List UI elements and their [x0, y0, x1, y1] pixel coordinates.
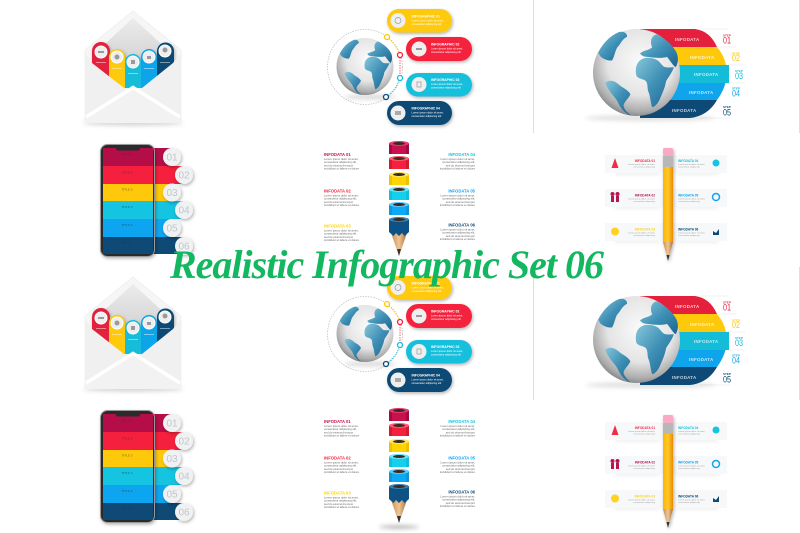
phone titles: TITLE 6 [122, 240, 133, 244]
pill 4: consectetur adipiscing elit [412, 114, 441, 118]
right text: INFODATA 05 [448, 188, 476, 194]
panel: phone bottom: 03 [166, 454, 178, 465]
left text: incididunt ut labore et dolore [324, 238, 360, 242]
right text: incididunt ut labore et dolore [440, 167, 475, 171]
pill 1 [387, 9, 452, 32]
card text left: INFODATA 01 [635, 159, 655, 163]
card text right: INFODATA 06 [678, 228, 699, 232]
pill 3: INFOGRAPHIC 03 [431, 78, 460, 82]
right text: sed do eiusmod tempor [446, 163, 475, 167]
panel: pencil with cards bottom: consectetur adipiscing [678, 432, 700, 436]
number circles: 01 [166, 152, 178, 164]
card text left: INFODATA 02 [635, 194, 655, 198]
panel: globe with pills bottom: INFOGRAPHIC 02 [431, 310, 460, 314]
step labels: STEP [732, 86, 740, 90]
panel: segmented pencil bottom: sed do eiusmod tempor [324, 502, 353, 506]
panel: phone bottom: TITLE 1 [122, 418, 133, 422]
right text: Lorem ipsum dolor sit amet, [440, 157, 475, 161]
panel: segmented pencil bottom: incididunt ut labore et dolore [324, 505, 360, 509]
pill 2 [406, 37, 472, 61]
panel: globe with pills bottom: consectetur adipiscing elit [431, 317, 461, 321]
ribbon text lines [96, 62, 170, 74]
band labels: INFODATA [689, 90, 714, 95]
phone titles: TITLE 2 [122, 170, 133, 174]
panel: pencil with cards bottom [605, 415, 727, 528]
card shadows [615, 172, 718, 242]
panel dividers [534, 0, 800, 400]
panel: segmented pencil bottom: sed do eiusmod tempor [324, 467, 353, 471]
panel: pencil with cards bottom: Lorem ipsum dolor sit amet, [678, 498, 705, 502]
envelope front [85, 53, 181, 118]
number circles: 04 [178, 206, 190, 216]
card text left: INFODATA 03 [635, 228, 655, 232]
panel: envelope bottom [83, 277, 183, 392]
panel: segmented pencil bottom: consectetur adipiscing elit, [324, 427, 357, 431]
pill 1: Lorem ipsum dolor sit amet, [412, 18, 444, 22]
phone screen [103, 146, 153, 254]
panel: globe with pills bottom: INFOGRAPHIC 03 [431, 345, 460, 349]
panel: segmented pencil bottom: INFODATA 04 [448, 419, 476, 424]
pill 4: Lorem ipsum dolor sit amet, [412, 110, 444, 114]
panel: segmented pencil bottom: sed do eiusmod tempor [446, 467, 475, 471]
left text: consectetur adipiscing elit, [324, 197, 357, 201]
panel: globe with pills bottom: Lorem ipsum dolor sit amet, [431, 314, 463, 318]
phone titles: TITLE 1 [122, 152, 133, 156]
panel: pencil with cards bottom: consectetur adipiscing [678, 501, 700, 504]
panel: segmented pencil bottom: sed do eiusmod tempor [324, 430, 353, 434]
left text: sed do eiusmod tempor [324, 235, 353, 239]
card text left [628, 159, 656, 237]
panel: globe with bands bottom: INFODATA [690, 322, 715, 327]
panel: segmented pencil bottom: INFODATA 02 [324, 456, 351, 460]
panel: pencil with cards bottom: Lorem ipsum dolor sit amet, [678, 464, 705, 468]
pill 2: Lorem ipsum dolor sit amet, [431, 46, 463, 50]
right text: consectetur adipiscing elit, [442, 160, 475, 164]
panel: globe with pills bottom: INFOGRAPHIC 04 [412, 374, 440, 378]
step labels: 05 [723, 108, 731, 119]
panel: globe with bands bottom: STEP [732, 318, 740, 322]
panel: globe with bands bottom: 01 [723, 302, 731, 314]
panel: segmented pencil bottom: incididunt ut labore et dolore [324, 470, 360, 474]
pill 4: INFOGRAPHIC 04 [412, 106, 440, 110]
panel: globe with bands bottom: INFODATA [689, 357, 714, 362]
panel: pencil with cards bottom: Lorem ipsum dolor sit amet, [628, 498, 655, 502]
right text: INFODATA 06 [448, 222, 476, 228]
panel: globe with bands bottom: INFODATA [675, 304, 700, 309]
panel: segmented pencil bottom: consectetur adipiscing elit, [324, 464, 357, 468]
panel: pencil with cards bottom: Lorem ipsum dolor sit amet, [628, 464, 655, 468]
right text: incididunt ut labore et dolore [440, 203, 475, 207]
right text [440, 152, 476, 241]
panel: segmented pencil bottom: consectetur adipiscing elit, [442, 464, 475, 468]
card text right: Lorem ipsum dolor sit amet, [678, 163, 705, 166]
panel: segmented pencil bottom: Lorem ipsum dolor sit amet, [324, 496, 359, 500]
right text: consectetur adipiscing elit, [442, 231, 475, 235]
card icons [610, 158, 720, 236]
panel: phone bottom: 04 [178, 472, 190, 482]
panel: phone bottom: TITLE 2 [122, 436, 133, 440]
panel: segmented pencil bottom: Lorem ipsum dolor sit amet, [324, 460, 359, 464]
panel: globe with bands bottom: 05 [723, 375, 731, 386]
panel: globe with bands bottom: INFODATA [672, 375, 697, 380]
right text: Lorem ipsum dolor sit amet, [440, 228, 475, 232]
panel: globe with pills bottom: consectetur adipiscing elit [412, 289, 441, 293]
panel: globe with bands bottom [585, 296, 745, 388]
ribbons [92, 42, 174, 92]
number circles: 03 [166, 188, 178, 199]
number circles: 06 [178, 242, 190, 252]
panel: globe with bands bottom: STEP [723, 372, 731, 376]
band labels [672, 37, 719, 113]
panel: segmented pencil bottom: INFODATA 06 [448, 490, 476, 494]
left text: INFODATA 02 [324, 188, 351, 194]
panel: segmented pencil bottom: INFODATA 01 [324, 419, 351, 424]
card text left: consectetur adipiscing [633, 166, 656, 168]
panel: pencil with cards bottom: INFODATA 04 [678, 426, 699, 430]
left text: sed do eiusmod tempor [324, 163, 353, 167]
panel: globe with pills bottom: Lorem ipsum dolor sit amet, [412, 378, 444, 382]
card text right: Lorem ipsum dolor sit amet, [678, 198, 705, 200]
pencil segments [389, 141, 409, 256]
pill 1: consectetur adipiscing elit [412, 22, 441, 26]
panel: phone bottom [100, 410, 193, 522]
panel: globe with pills bottom: INFOGRAPHIC 01 [412, 282, 440, 286]
card text left: Lorem ipsum dolor sit amet, [628, 198, 655, 200]
card text right: INFODATA 05 [678, 194, 699, 198]
panel: pencil with cards bottom: Lorem ipsum dolor sit amet, [628, 430, 655, 433]
right text: sed do eiusmod tempor [446, 234, 475, 238]
panel: pencil with cards bottom: consectetur adipiscing [633, 501, 656, 504]
panel: phone bottom: 06 [178, 508, 190, 518]
panel: segmented pencil bottom: Lorem ipsum dolor sit amet, [440, 460, 475, 464]
number circles: 05 [166, 224, 178, 234]
panel: globe with bands bottom: STEP [723, 300, 731, 304]
panel: segmented pencil bottom: INFODATA 05 [448, 456, 476, 460]
panel: pencil with cards bottom: INFODATA 05 [678, 460, 699, 464]
card text right: consectetur adipiscing [678, 200, 700, 203]
panel: globe with pills bottom: consectetur adipiscing elit [412, 381, 441, 385]
panel: globe with pills bottom: Lorem ipsum dolor sit amet, [431, 349, 463, 353]
phone titles [122, 152, 133, 244]
phone body [100, 144, 154, 256]
panel: segmented pencil bottom: sed do eiusmod tempor [446, 501, 475, 505]
left text: INFODATA 03 [324, 224, 351, 228]
pill 4 [387, 101, 452, 125]
left text: Lorem ipsum dolor sit amet, [324, 194, 359, 198]
phone tabs [150, 148, 184, 254]
left text: consectetur adipiscing elit, [324, 160, 357, 164]
right text: incididunt ut labore et dolore [440, 237, 475, 241]
right text: Lorem ipsum dolor sit amet, [440, 194, 475, 198]
panel: globe with bands bottom: 02 [732, 320, 740, 331]
panel: pencil with cards bottom: INFODATA 03 [635, 494, 655, 498]
panel: globe with pills bottom [328, 276, 472, 392]
panel: globe with pills bottom: consectetur adipiscing elit [431, 352, 461, 356]
phone titles: TITLE 3 [122, 188, 133, 192]
number circles: 02 [178, 170, 190, 182]
panel: globe with bands bottom: STEP [735, 336, 743, 340]
panel: globe with bands top [585, 29, 745, 121]
left text: INFODATA 01 [324, 152, 351, 157]
panel: pencil with cards bottom: Lorem ipsum dolor sit amet, [678, 430, 705, 433]
title: Realistic Infographic Set 06 [169, 242, 604, 287]
pill 3: Lorem ipsum dolor sit amet, [431, 82, 463, 86]
card text left: consectetur adipiscing [633, 200, 656, 203]
panel: segmented pencil bottom [324, 408, 476, 528]
panel: globe with bands bottom: 03 [735, 338, 743, 349]
step labels: STEP [735, 69, 743, 73]
panel: segmented pencil bottom: incididunt ut labore et dolore [440, 504, 475, 508]
panel: pencil with cards top [605, 148, 727, 261]
left text [324, 152, 360, 242]
pill 2: INFOGRAPHIC 02 [431, 42, 460, 46]
panel: pencil with cards bottom: INFODATA 02 [635, 460, 655, 464]
panel: globe with bands bottom: 04 [732, 356, 740, 367]
panel: segmented pencil bottom: Lorem ipsum dolor sit amet, [324, 424, 359, 428]
step labels: STEP [732, 52, 740, 56]
panel: segmented pencil bottom: incididunt ut labore et dolore [440, 470, 475, 474]
panel: phone bottom: TITLE 6 [122, 506, 133, 510]
panel: segmented pencil bottom: Lorem ipsum dolor sit amet, [440, 494, 475, 498]
step labels: 03 [735, 71, 743, 82]
panel: segmented pencil bottom: incididunt ut labore et dolore [324, 434, 360, 438]
panel: pencil with cards bottom: consectetur adipiscing [633, 467, 656, 470]
pill 2: consectetur adipiscing elit [431, 50, 461, 54]
right text: INFODATA 04 [448, 152, 476, 157]
panel: phone bottom: 02 [178, 436, 190, 448]
panel: segmented pencil top [324, 141, 476, 256]
step labels: 02 [732, 53, 740, 64]
pill 3: consectetur adipiscing elit [431, 86, 461, 90]
band labels: INFODATA [672, 108, 697, 113]
step labels: 04 [732, 89, 740, 100]
ribbon icons [98, 48, 168, 64]
panel: segmented pencil bottom: consectetur adipiscing elit, [324, 499, 357, 503]
left text: Lorem ipsum dolor sit amet, [324, 157, 359, 161]
ribbon buttons [95, 45, 171, 68]
right text: sed do eiusmod tempor [446, 200, 475, 204]
panel: segmented pencil bottom: consectetur adipiscing elit, [442, 427, 475, 431]
phone titles: TITLE 5 [122, 223, 133, 227]
nodes [384, 34, 402, 100]
panel: pencil with cards bottom: INFODATA 01 [635, 426, 655, 430]
panel: globe with pills bottom: Lorem ipsum dolor sit amet, [412, 286, 444, 290]
panel: pencil with cards bottom: consectetur adipiscing [678, 467, 700, 470]
card text left: Lorem ipsum dolor sit amet, [628, 163, 655, 166]
panel: phone bottom: TITLE 3 [122, 454, 133, 458]
number circles [163, 148, 193, 255]
panel: phone bottom: TITLE 5 [122, 489, 133, 493]
card text left: Lorem ipsum dolor sit amet, [628, 232, 655, 234]
step labels [723, 34, 743, 119]
panel: envelope top [83, 11, 183, 126]
panel: segmented pencil bottom: sed do eiusmod tempor [446, 430, 475, 434]
panel: phone top [100, 144, 193, 256]
pill 1: INFOGRAPHIC 01 [412, 14, 440, 18]
panel: globe with bands bottom: INFODATA [694, 339, 719, 344]
card text left: consectetur adipiscing [633, 234, 656, 237]
connectors [386, 37, 400, 97]
panel: phone bottom: TITLE 4 [122, 471, 133, 475]
card text right: consectetur adipiscing [678, 234, 700, 237]
card text right: INFODATA 04 [678, 159, 699, 163]
yellow pencil [663, 148, 673, 261]
pill 3 [406, 73, 472, 96]
left text: consectetur adipiscing elit, [324, 232, 357, 236]
band labels: INFODATA [694, 72, 719, 77]
panel: segmented pencil bottom: INFODATA 03 [324, 490, 351, 496]
panel: globe with bands bottom: STEP [732, 354, 740, 358]
panel: pencil with cards bottom: consectetur adipiscing [633, 432, 656, 436]
band labels: INFODATA [690, 55, 715, 60]
left text: incididunt ut labore et dolore [324, 203, 360, 207]
panel: segmented pencil bottom: consectetur adipiscing elit, [442, 498, 475, 502]
panel: segmented pencil bottom: Lorem ipsum dolor sit amet, [440, 424, 475, 428]
step labels: STEP [723, 105, 731, 109]
cards [605, 155, 727, 241]
left text: Lorem ipsum dolor sit amet, [324, 228, 359, 232]
panel: globe with pills top [328, 9, 472, 125]
panel: pencil with cards bottom: INFODATA 06 [678, 494, 699, 498]
right text: consectetur adipiscing elit, [442, 197, 475, 201]
left text: sed do eiusmod tempor [324, 200, 353, 204]
phone titles: TITLE 4 [122, 205, 133, 209]
panel: phone bottom: 05 [166, 490, 178, 500]
card text right [678, 159, 705, 237]
step labels: STEP [723, 34, 731, 38]
card text right: Lorem ipsum dolor sit amet, [678, 232, 705, 234]
panel: segmented pencil bottom: incididunt ut labore et dolore [440, 434, 475, 438]
panel: phone bottom: 01 [166, 418, 178, 430]
left text: incididunt ut labore et dolore [324, 167, 360, 171]
card text right: consectetur adipiscing [678, 166, 700, 168]
step labels: 01 [723, 36, 731, 46]
band labels: INFODATA [675, 37, 700, 42]
